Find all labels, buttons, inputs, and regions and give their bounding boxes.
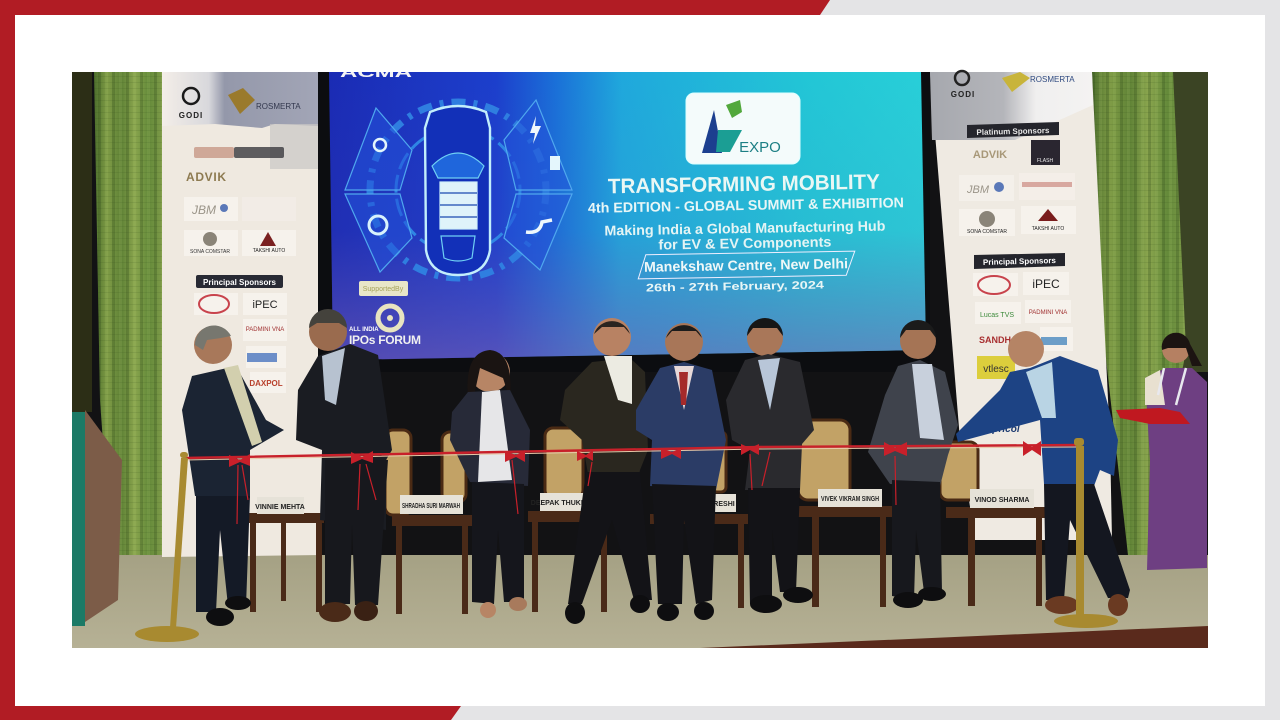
podium bbox=[72, 410, 122, 626]
tables with name plates bbox=[248, 489, 1050, 614]
person 7 bbox=[868, 320, 958, 608]
icon: map pin bbox=[374, 139, 386, 151]
right sponsor banner: SANDHAR bbox=[979, 335, 1025, 345]
people bbox=[182, 309, 1207, 626]
logo: all india forum bbox=[349, 306, 421, 347]
left sponsor banner: iPEC bbox=[252, 299, 278, 311]
chairs bbox=[385, 420, 978, 515]
floor bbox=[72, 555, 1208, 648]
tables with name plates: SHRADHA SURI MARWAH bbox=[402, 503, 460, 510]
right sponsor banner: ADVIK bbox=[973, 149, 1007, 161]
venue tag: Manekshaw Centre, New Delhi bbox=[644, 255, 848, 275]
right sponsor banner: JBM bbox=[966, 184, 990, 196]
logo: EV Expo: EXPO bbox=[739, 139, 781, 156]
right sponsor banner: PADMINI VNA bbox=[1029, 310, 1067, 316]
logo: all india forum: ALL INDIA bbox=[349, 327, 379, 333]
logo: sponsor bbox=[359, 281, 408, 296]
subheading: components: for EV & EV Components bbox=[658, 233, 832, 253]
right sponsor banner: vtlesc bbox=[983, 364, 1009, 375]
left sponsor banner: ADVIK bbox=[186, 170, 226, 184]
person 5 bbox=[636, 323, 726, 621]
projection screen bbox=[318, 64, 930, 372]
left sponsor banner: ROSMERTA bbox=[256, 102, 301, 111]
left sponsor banner: SONA COMSTAR bbox=[190, 249, 230, 255]
left sponsor banner: JBM bbox=[191, 203, 216, 217]
right sponsor banner bbox=[930, 71, 1112, 540]
right sponsor banner: iPEC bbox=[1032, 277, 1060, 291]
right sponsor banner: ROSMERTA bbox=[1030, 75, 1075, 84]
left sponsor banner: DAXPOL bbox=[249, 379, 283, 388]
heading: transforming mobility: TRANSFORMING MOBILITY bbox=[608, 171, 880, 198]
right sponsor banner: FLASH bbox=[1037, 158, 1053, 164]
left sponsor banner: GODI bbox=[179, 111, 203, 120]
right sponsor banner: pricol bbox=[991, 424, 1020, 435]
right sponsor banner: Platinum Sponsors bbox=[976, 126, 1050, 137]
icon: cable bbox=[526, 220, 552, 232]
person 3 bbox=[450, 350, 530, 618]
logo: all india forum: IPOs FORUM bbox=[349, 333, 421, 347]
venue tag bbox=[638, 251, 855, 279]
left sponsor banner: TAKSHI AUTO bbox=[253, 248, 285, 254]
subheading: making india: Making India a Global Manufacturing Hub bbox=[604, 218, 886, 238]
logo: sponsor: SupportedBy bbox=[363, 286, 404, 293]
right sponsor banner: GODI bbox=[951, 90, 975, 99]
left sponsor banner: Principal Sponsors bbox=[203, 278, 277, 287]
person 6 bbox=[726, 318, 814, 613]
left sponsor banner: PADMINI VNA bbox=[246, 327, 284, 333]
stage backdrop bbox=[72, 72, 1208, 648]
tables with name plates: RESHI bbox=[713, 501, 735, 508]
logo: EV Expo bbox=[686, 93, 800, 164]
curtains bbox=[94, 72, 1186, 570]
icon: bolt bbox=[530, 116, 541, 144]
right sponsor banner: SONA COMSTAR bbox=[967, 229, 1007, 235]
ribbon with bows bbox=[185, 441, 1078, 524]
left sponsor banner bbox=[162, 72, 322, 557]
right sponsor banner: Principal Sponsors bbox=[983, 256, 1057, 267]
right sponsor banner: Lucas TVS bbox=[980, 312, 1014, 319]
icon: gauge bbox=[369, 216, 387, 234]
person 9: hostess with tray bbox=[1116, 333, 1207, 570]
icon: charger plug bbox=[550, 156, 560, 170]
tables with name plates: VINNIE MEHTA bbox=[255, 504, 305, 511]
tables with name plates: DEEPAK THUKRAL bbox=[531, 500, 596, 507]
brass stanchions bbox=[135, 438, 1118, 642]
cropped screen logo: ACMA bbox=[340, 64, 412, 80]
right sponsor banner: TAKSHI AUTO bbox=[1032, 226, 1064, 232]
person 8 bbox=[956, 331, 1130, 616]
tables with name plates: VIVEK VIKRAM SINGH bbox=[821, 496, 879, 503]
person 1 bbox=[182, 325, 284, 626]
date: 26th - 27th February, 2024 bbox=[646, 279, 825, 295]
icon: car graphic bbox=[345, 100, 572, 278]
person 4 bbox=[560, 318, 652, 624]
photo: event stage bbox=[72, 64, 1208, 648]
tables with name plates: VINOD SHARMA bbox=[975, 497, 1029, 504]
subheading: edition: 4th EDITION - GLOBAL SUMMIT & EXHIBITION bbox=[588, 194, 904, 216]
person 2 bbox=[296, 309, 392, 622]
